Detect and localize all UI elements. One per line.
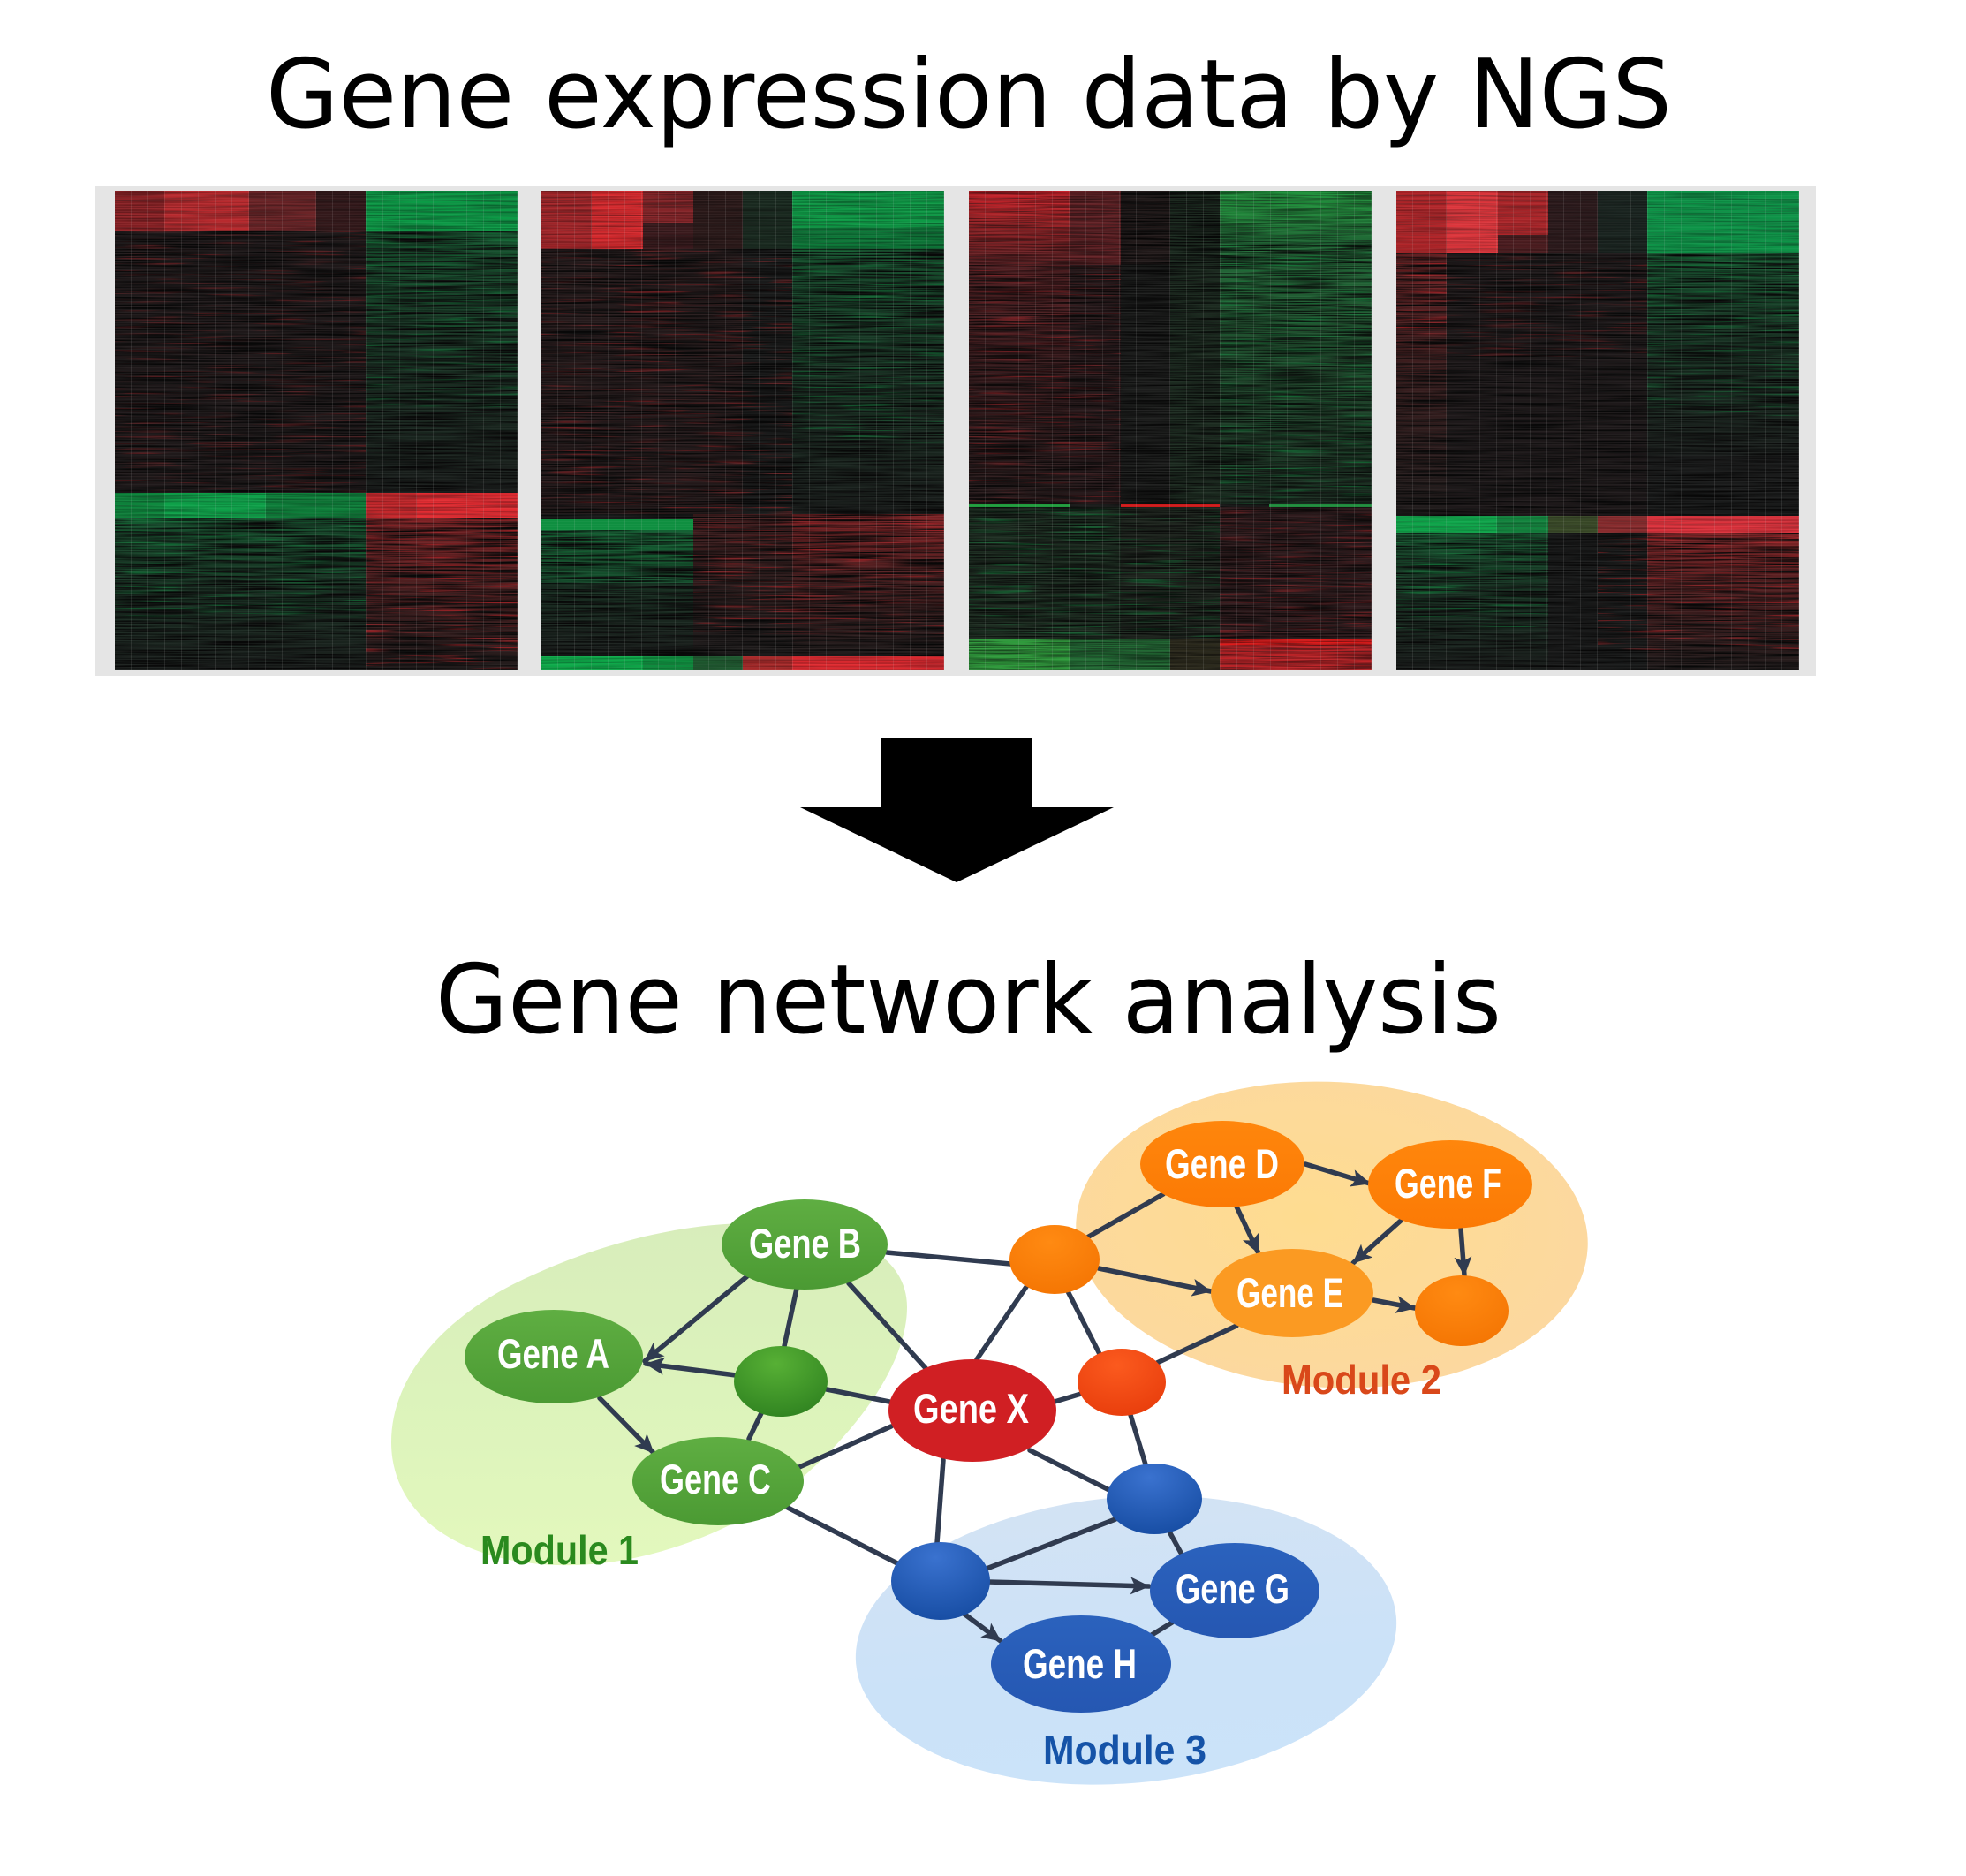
node: gene C [632, 1437, 804, 1525]
module 3 background [843, 1474, 1409, 1806]
title: gene expression data by NGS: Gene expression data by NGS [266, 40, 1672, 150]
node: unnamed orange upper [1009, 1225, 1100, 1294]
network edges [600, 1164, 1464, 1641]
node: gene A: Gene A [497, 1330, 609, 1377]
node: gene F [1368, 1140, 1532, 1229]
heatmap 1 [115, 191, 518, 670]
node: unnamed blue upper [1107, 1464, 1202, 1534]
label: module 2: Module 2 [1282, 1357, 1441, 1403]
title: gene network analysis: Gene network analysis [435, 945, 1501, 1055]
node: gene E: Gene E [1236, 1269, 1343, 1316]
node: gene H [991, 1615, 1171, 1713]
node: gene D [1140, 1121, 1304, 1207]
node: unnamed blue left [891, 1542, 990, 1620]
label: module 3: Module 3 [1043, 1727, 1206, 1773]
node: gene F: Gene F [1395, 1160, 1501, 1207]
heatmap 2 [541, 191, 944, 670]
node: unnamed red-orange [1078, 1349, 1166, 1416]
label: module 1: Module 1 [480, 1527, 639, 1573]
module 2 background [1068, 1069, 1596, 1401]
node: unnamed green [734, 1346, 828, 1417]
gene network diagram [391, 1069, 1596, 1806]
node: gene B: Gene B [749, 1220, 861, 1267]
node: gene E [1211, 1249, 1373, 1337]
heatmap strip panel [95, 186, 1816, 676]
node: gene A [465, 1310, 643, 1403]
arrow: down to network analysis [800, 738, 1114, 882]
node: gene X: Gene X [913, 1385, 1029, 1432]
node: gene B [722, 1199, 888, 1290]
node: gene G [1150, 1543, 1319, 1638]
node: gene D: Gene D [1165, 1140, 1279, 1187]
node: unnamed orange right [1415, 1275, 1509, 1346]
node: gene C: Gene C [660, 1456, 771, 1502]
module 1 background [391, 1223, 907, 1565]
heatmap 3 [969, 191, 1372, 670]
heatmap 4 [1396, 191, 1799, 670]
node: gene X [888, 1359, 1056, 1462]
node: gene H: Gene H [1023, 1640, 1137, 1687]
node: gene G: Gene G [1176, 1565, 1289, 1612]
